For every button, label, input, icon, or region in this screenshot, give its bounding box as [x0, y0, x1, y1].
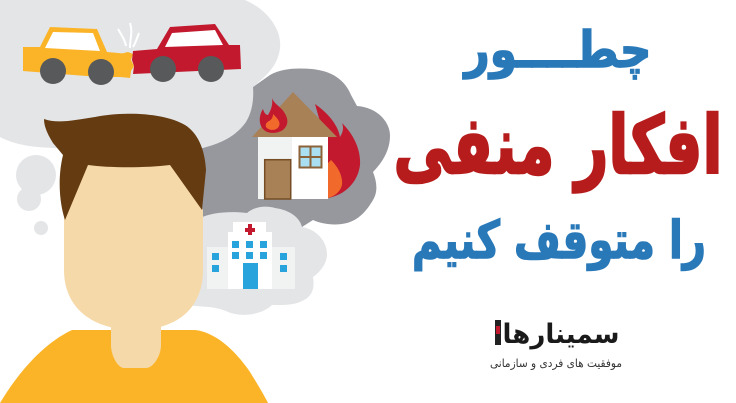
person — [0, 114, 268, 403]
icon: hospital — [207, 222, 295, 289]
logo tagline: موفقیت های فردی و سازمانی — [490, 356, 622, 371]
icon: burning house — [252, 92, 360, 199]
logo icon — [495, 320, 501, 345]
face — [64, 160, 203, 330]
heading line 1: چطــــور — [462, 21, 652, 80]
logo — [490, 319, 622, 371]
hair — [44, 114, 206, 220]
icon: red car — [132, 24, 241, 82]
icon: yellow car — [23, 27, 134, 85]
neck — [111, 310, 161, 368]
shirt — [0, 330, 268, 403]
logo wordmark: سمینارها — [502, 319, 620, 350]
thought bubble: house fire — [190, 69, 390, 227]
thought bubble: hospital — [188, 207, 327, 315]
thought bubble: car crash — [0, 0, 280, 235]
icon: crash spark — [118, 23, 139, 48]
